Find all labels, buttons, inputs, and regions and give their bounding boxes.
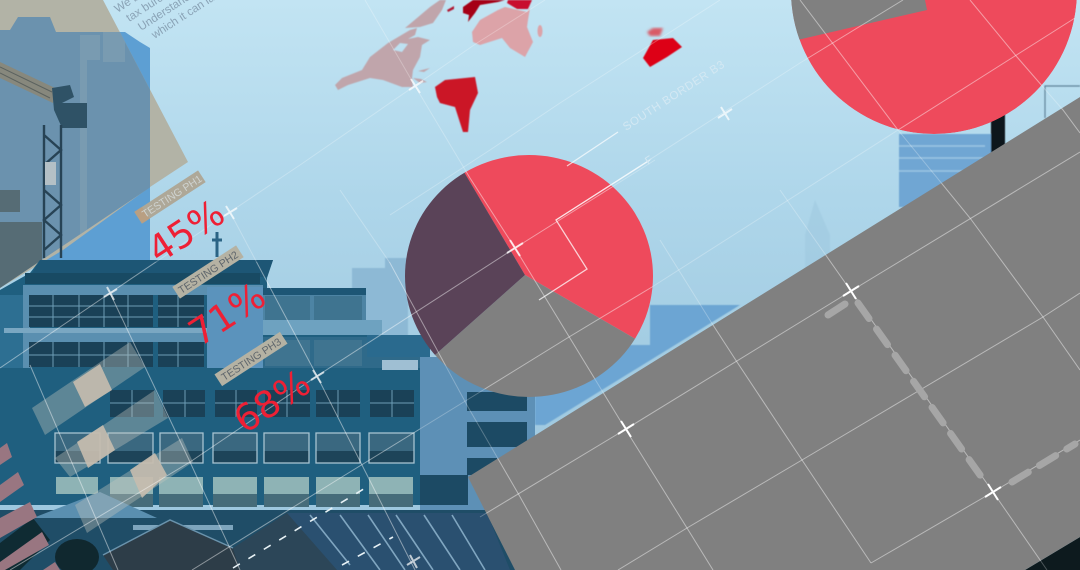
top right pie chart	[780, 0, 1077, 134]
Africa	[472, 7, 533, 57]
lower street level	[0, 510, 520, 570]
translucent striped bars, lower left	[32, 342, 193, 533]
label: South Border B3: SOUTH BORDER B3	[621, 59, 727, 134]
central pie chart	[405, 155, 653, 397]
dashed white route, roof	[342, 537, 393, 565]
stat: 45%: 45%	[140, 191, 232, 272]
lit window row	[56, 477, 413, 507]
world map	[335, 0, 682, 132]
pink stripes, far left	[0, 443, 60, 570]
middle window row	[55, 433, 414, 463]
bar 2	[55, 390, 168, 477]
glass roof	[287, 513, 510, 570]
South America	[435, 77, 478, 132]
upper window rows	[29, 295, 414, 417]
North America	[335, 28, 430, 90]
faint paragraph text, rotated	[113, 0, 228, 51]
tower seen through panel	[0, 17, 150, 290]
main office building	[0, 260, 420, 505]
Iceland and UK fragment	[447, 6, 454, 12]
bar 3	[75, 438, 193, 533]
grey slice	[791, 0, 927, 40]
grey rotated panel	[468, 97, 1080, 570]
distant hazy buildings	[352, 86, 1080, 425]
callout line to south border label	[567, 132, 618, 166]
stat: 71%: 71%	[181, 274, 273, 355]
callout bracket on pie	[539, 160, 650, 300]
tag: Testing PH1: TESTING PH1	[140, 173, 204, 221]
translucent panel, top left	[0, 0, 188, 288]
Middle East	[507, 0, 532, 9]
tall tower behind crane	[0, 17, 150, 262]
grey slice	[435, 275, 635, 397]
dark corner, bottom right	[1025, 537, 1080, 570]
Europe	[463, 0, 505, 22]
Australia	[643, 38, 682, 67]
dashed white route, lower	[233, 487, 367, 568]
purple slice	[405, 172, 525, 355]
red slice	[464, 155, 653, 338]
crane	[0, 62, 87, 258]
red slice	[791, 0, 1077, 134]
Caribbean	[413, 68, 430, 83]
tag: Testing PH2: TESTING PH2	[176, 249, 241, 297]
antenna	[212, 232, 222, 257]
bar 1	[32, 342, 145, 435]
crosshair markers	[104, 79, 1001, 568]
dashed grey route on panel	[828, 303, 1075, 482]
Indonesia smear	[647, 28, 663, 36]
label: F: F	[643, 154, 656, 168]
tag: Testing PH3: TESTING PH3	[219, 336, 284, 384]
stat: 68%: 68%	[226, 361, 318, 442]
Madagascar	[538, 25, 542, 37]
right annex	[420, 357, 535, 510]
Greenland	[405, 0, 446, 28]
